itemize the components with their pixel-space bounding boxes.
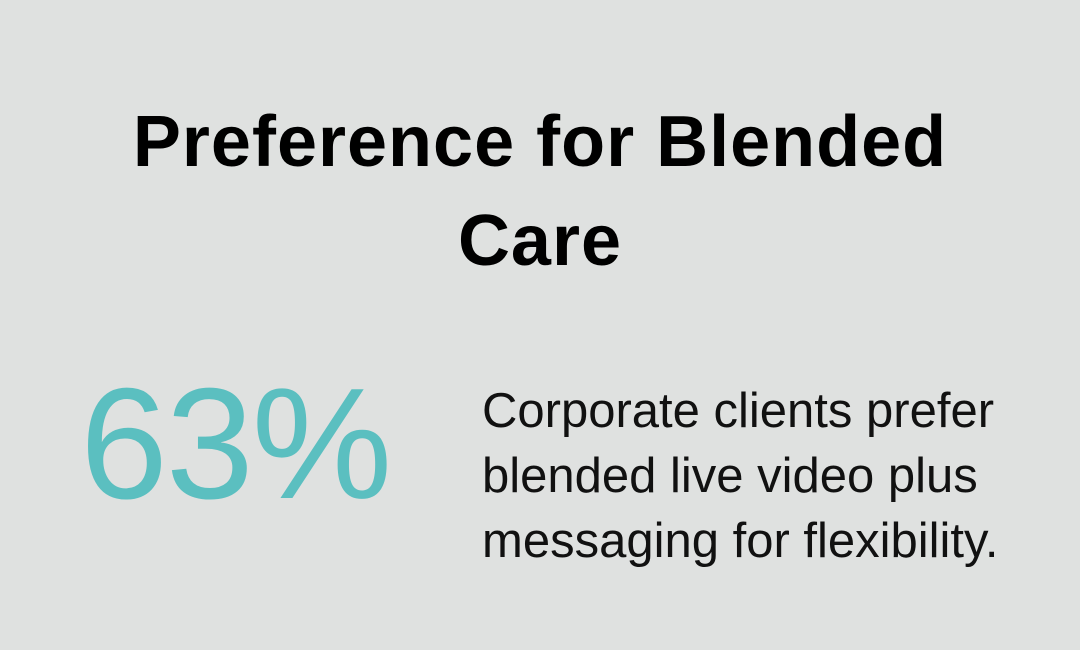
stat: 63%: 63%: [80, 356, 390, 532]
description text: Corporate clients prefer: [482, 384, 994, 438]
description text: blended live video plus: [482, 449, 978, 503]
title: Preference for Blended: [133, 102, 947, 182]
description text: [482, 384, 999, 568]
description text: messaging for flexibility.: [482, 514, 999, 568]
title: Care: [458, 201, 622, 281]
title: [133, 102, 947, 281]
